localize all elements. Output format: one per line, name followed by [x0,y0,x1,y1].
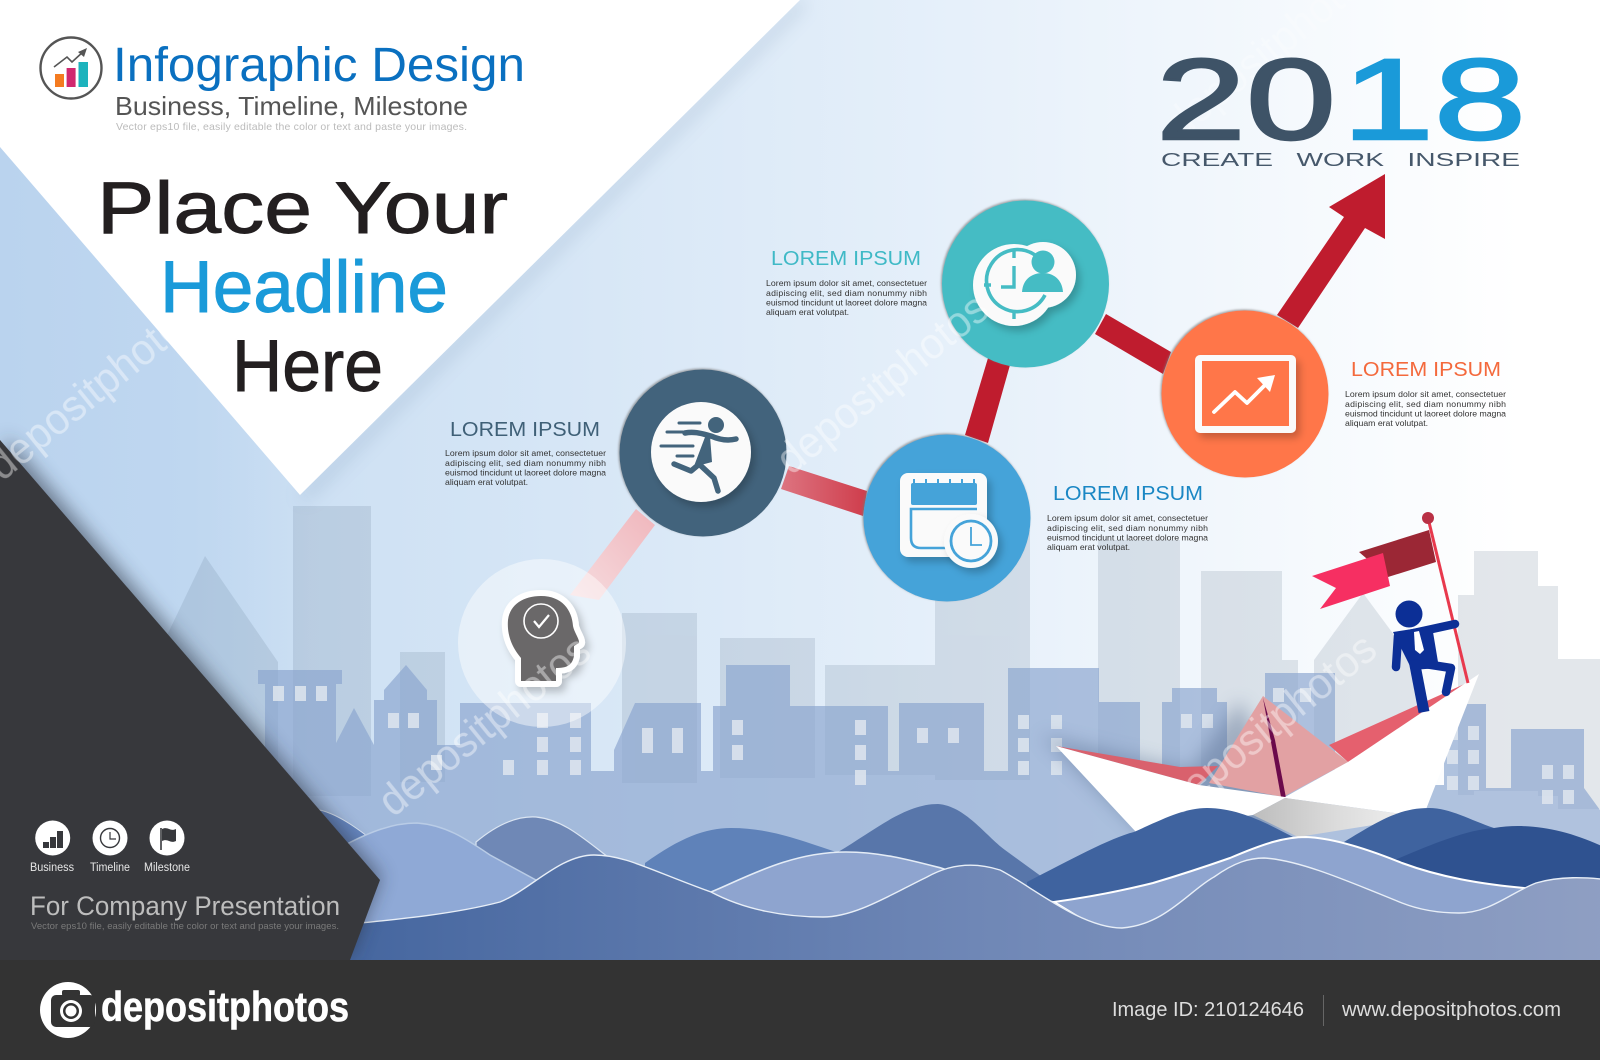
year 2018: 18 [1342,36,1526,164]
skyline windows [273,686,1574,804]
flag and pole [1312,512,1468,683]
milestone 4: clock and person circle [942,200,1109,368]
headline: Place Your [97,168,508,249]
wave: darkest far right [1390,826,1600,920]
text: milestone 4 description: aliquam erat volutpat. [1345,418,1428,428]
text: milestone 3 description: adipiscing elit, sed diam nonummy nibh [1047,523,1208,533]
year 2018: 20 [1156,36,1336,164]
footer image id: Image ID: 210124646 [1112,999,1304,1021]
hill: light left [345,823,545,950]
text: milestone 4 description [1345,359,1506,428]
hill: third [645,828,860,900]
paper boat [1056,674,1479,837]
text: milestone 4 description: adipiscing elit, sed diam nonummy nibh [1345,399,1506,409]
text: milestone 2 description: euismod tincidunt ut laoreet dolore magna [766,298,927,308]
text: milestone 2 description: LOREM IPSUM [771,248,921,270]
text: milestone 4 description: euismod tincidunt ut laoreet dolore magna [1345,408,1506,418]
white headline panel shadow [300,0,806,500]
icon labels [30,862,190,874]
milestone 5: chart circle [1162,310,1328,478]
icon labels: Timeline [90,862,130,874]
link: calendar to clock [965,358,1010,443]
logo icon [40,38,102,98]
watermark text: depositphotos [766,283,998,484]
arrow: growth arrow [1277,174,1385,328]
milestone 1: head circle [458,559,626,727]
subtitle: Business, Timeline, Milestone [115,91,468,121]
skyline back layer [160,506,1600,809]
slogan: CREATE WORK INSPIRE [1161,150,1520,170]
company presentation text: For Company Presentation [30,891,340,921]
hill: second [476,817,612,910]
milestone 3: calendar circle [864,434,1030,602]
watermark text: depositphotos [1154,623,1386,824]
text: milestone 1 description: Lorem ipsum dolor sit amet, consectetuer [445,448,606,458]
icon: chart board [1195,355,1296,433]
text: milestone 3 description: Lorem ipsum dolor sit amet, consectetuer [1047,513,1208,523]
company note: Vector eps10 file, easily editable the color or text and paste your images. [31,921,339,932]
footer bar [0,960,1600,1060]
subtitle note: Vector eps10 file, easily editable the color or text and paste your images. [116,121,467,133]
icon: timeline [92,820,128,856]
wave: main foreground [340,855,1600,975]
milestone 2: runner circle [620,370,786,536]
text: milestone 4 description: LOREM IPSUM [1351,359,1501,381]
icon labels: Business [30,862,74,874]
text: milestone 4 description: Lorem ipsum dolor sit amet, consectetuer [1345,389,1506,399]
wave: translucent left [711,852,1054,930]
footer divider [1323,995,1324,1026]
headline: Headline [160,247,448,328]
text: milestone 1 description: LOREM IPSUM [450,419,600,441]
wave: translucent right [1054,837,1524,930]
headline [97,168,508,407]
text: milestone 2 description: Lorem ipsum dolor sit amet, consectetuer [766,278,927,288]
text: milestone 3 description [1047,483,1208,552]
businessman figure [1393,600,1455,712]
icon: head with check [508,596,579,681]
text: milestone 1 description: aliquam erat volutpat. [445,477,528,487]
icon labels: Milestone [144,862,190,874]
link: runner to calendar [781,466,867,516]
icon: business [35,820,70,856]
text: milestone 3 description: LOREM IPSUM [1053,483,1203,505]
text: milestone 3 description: aliquam erat volutpat. [1047,542,1130,552]
wave: dark back right [1027,808,1600,960]
text: milestone 2 description [766,248,927,317]
watermark text: depositphotos [368,625,600,826]
year 2018 [1156,36,1526,164]
white headline panel [0,0,800,495]
dark panel shadow [6,436,381,956]
left pale blue triangle [0,147,320,800]
title: Infographic Design [113,39,525,92]
skyline front layer and ground [0,665,1600,960]
hill: fourth [838,804,1060,900]
dark corner panel [0,440,380,960]
headline: Here [232,326,383,407]
watermark text [0,0,1387,826]
text: milestone 2 description: adipiscing elit, sed diam nonummy nibh [766,288,927,298]
text: milestone 2 description: aliquam erat volutpat. [766,307,849,317]
footer url: www.depositphotos.com [1341,999,1561,1021]
icon: runner [651,402,751,502]
icon: calendar and clock [900,473,998,568]
paper boat shadow [1040,700,1300,840]
text: milestone 3 description: euismod tincidunt ut laoreet dolore magna [1047,532,1208,542]
icon: clock and person [973,242,1076,326]
text: milestone 1 description: euismod tincidunt ut laoreet dolore magna [445,468,606,478]
link: head to runner [570,509,655,600]
footer logo: depositphotos [101,983,349,1030]
hill: small left [320,810,385,900]
text: milestone 1 description: adipiscing elit, sed diam nonummy nibh [445,458,606,468]
icon: milestone [150,820,184,856]
footer logo [40,982,349,1038]
text: milestone 1 description [445,419,606,487]
link: clock to chart [1095,314,1171,374]
